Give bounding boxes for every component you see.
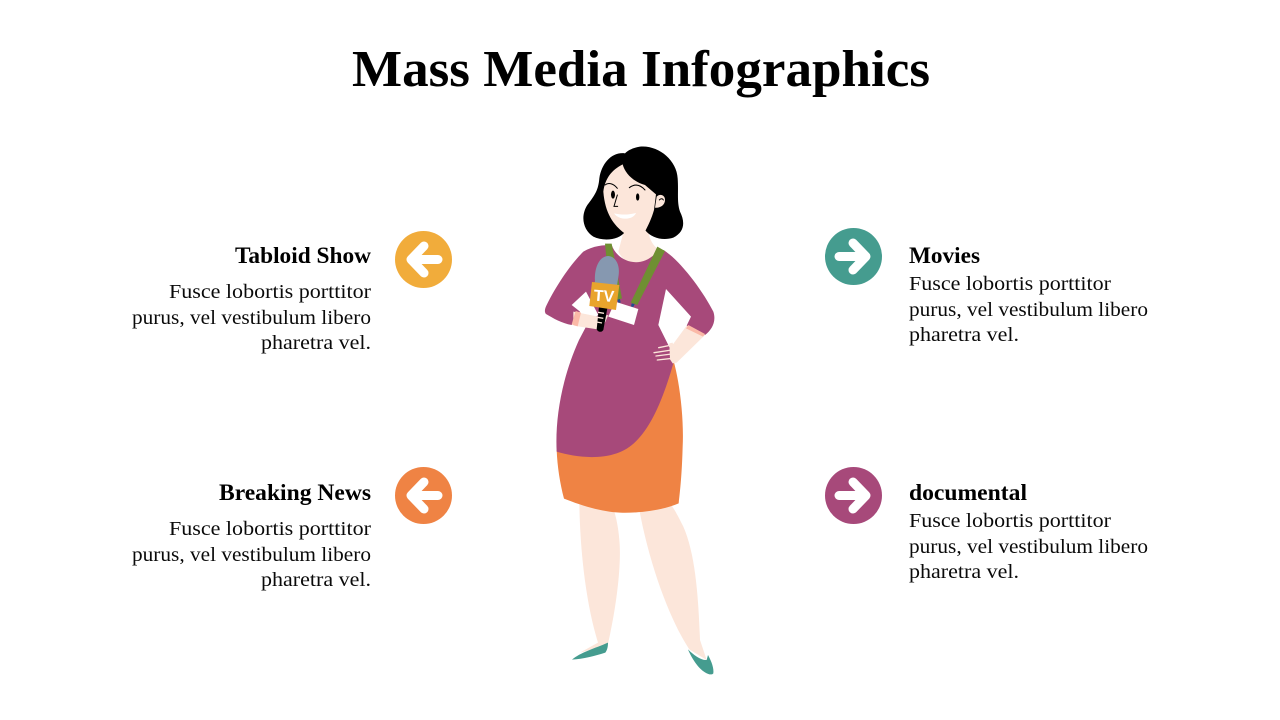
panel: Tabloid Show <box>132 231 452 354</box>
text block: Breaking News description <box>132 518 371 591</box>
heading: documental: documental <box>909 480 1027 505</box>
text block: documental description: Fusce lobortis porttitor <box>909 510 1111 532</box>
text block: documental description <box>909 510 1148 583</box>
fingers on handle <box>597 312 604 323</box>
text block: Breaking News description: Fusce lobortis porttitor <box>169 518 371 540</box>
name badge <box>608 302 638 325</box>
text block: documental description: pharetra vel. <box>909 561 1019 583</box>
purple dress with sleeves <box>545 245 714 457</box>
TV label: TV <box>593 288 615 306</box>
illustration: TV reporter woman <box>545 147 714 674</box>
left cuff <box>572 311 581 326</box>
face <box>603 164 656 234</box>
text block: Breaking News description: pharetra vel. <box>261 569 371 591</box>
left hand <box>573 312 608 330</box>
right shoe <box>688 649 713 674</box>
icon: teal right arrow <box>825 228 882 285</box>
text block: Movies description: Fusce lobortis porttitor <box>909 273 1111 295</box>
left shoe <box>572 643 608 660</box>
mic handle <box>597 307 607 332</box>
text block: Movies description <box>909 273 1148 346</box>
title: Mass Media Infographics <box>352 41 930 98</box>
badge and lanyard <box>605 244 665 325</box>
left leg <box>579 503 620 653</box>
ear <box>655 195 665 208</box>
text block: Tabloid Show description <box>132 281 371 354</box>
neck <box>618 230 659 264</box>
hair and face <box>583 147 683 239</box>
panel: Breaking News <box>132 467 452 591</box>
heading: Tabloid Show: Tabloid Show <box>235 243 371 268</box>
right hand fingers <box>654 343 677 363</box>
badge clips <box>617 299 635 307</box>
text block: Tabloid Show description: pharetra vel. <box>261 332 371 354</box>
text block: Movies description: purus, vel vestibulum libero <box>909 299 1148 321</box>
icon: yellow left arrow <box>395 231 452 288</box>
text block: Tabloid Show description: purus, vel vestibulum libero <box>132 307 371 329</box>
text block: Movies description: pharetra vel. <box>909 324 1019 346</box>
TV cube <box>589 282 619 310</box>
green lanyard <box>605 244 665 305</box>
smile <box>614 213 636 219</box>
text block: documental description: purus, vel vestibulum libero <box>909 536 1148 558</box>
mic head <box>593 256 619 292</box>
arms, hands and cuffs <box>572 311 705 363</box>
hair <box>583 147 683 239</box>
orange skirt <box>557 360 683 513</box>
panel: documental <box>825 467 1148 583</box>
icon: magenta right arrow <box>825 467 882 524</box>
microphone <box>589 256 619 332</box>
eyes, brows and nose <box>605 184 663 206</box>
right cuff <box>686 325 705 337</box>
right forearm <box>670 326 705 363</box>
heading: Movies: Movies <box>909 243 980 268</box>
text block: Breaking News description: purus, vel vestibulum libero <box>132 544 371 566</box>
text block: Tabloid Show description: Fusce lobortis porttitor <box>169 281 371 303</box>
lower body: legs, skirt, shoes <box>557 360 713 674</box>
panel: Movies <box>825 228 1148 346</box>
heading: Breaking News: Breaking News <box>219 480 371 505</box>
right leg <box>639 503 707 660</box>
icon: orange left arrow <box>395 467 452 524</box>
